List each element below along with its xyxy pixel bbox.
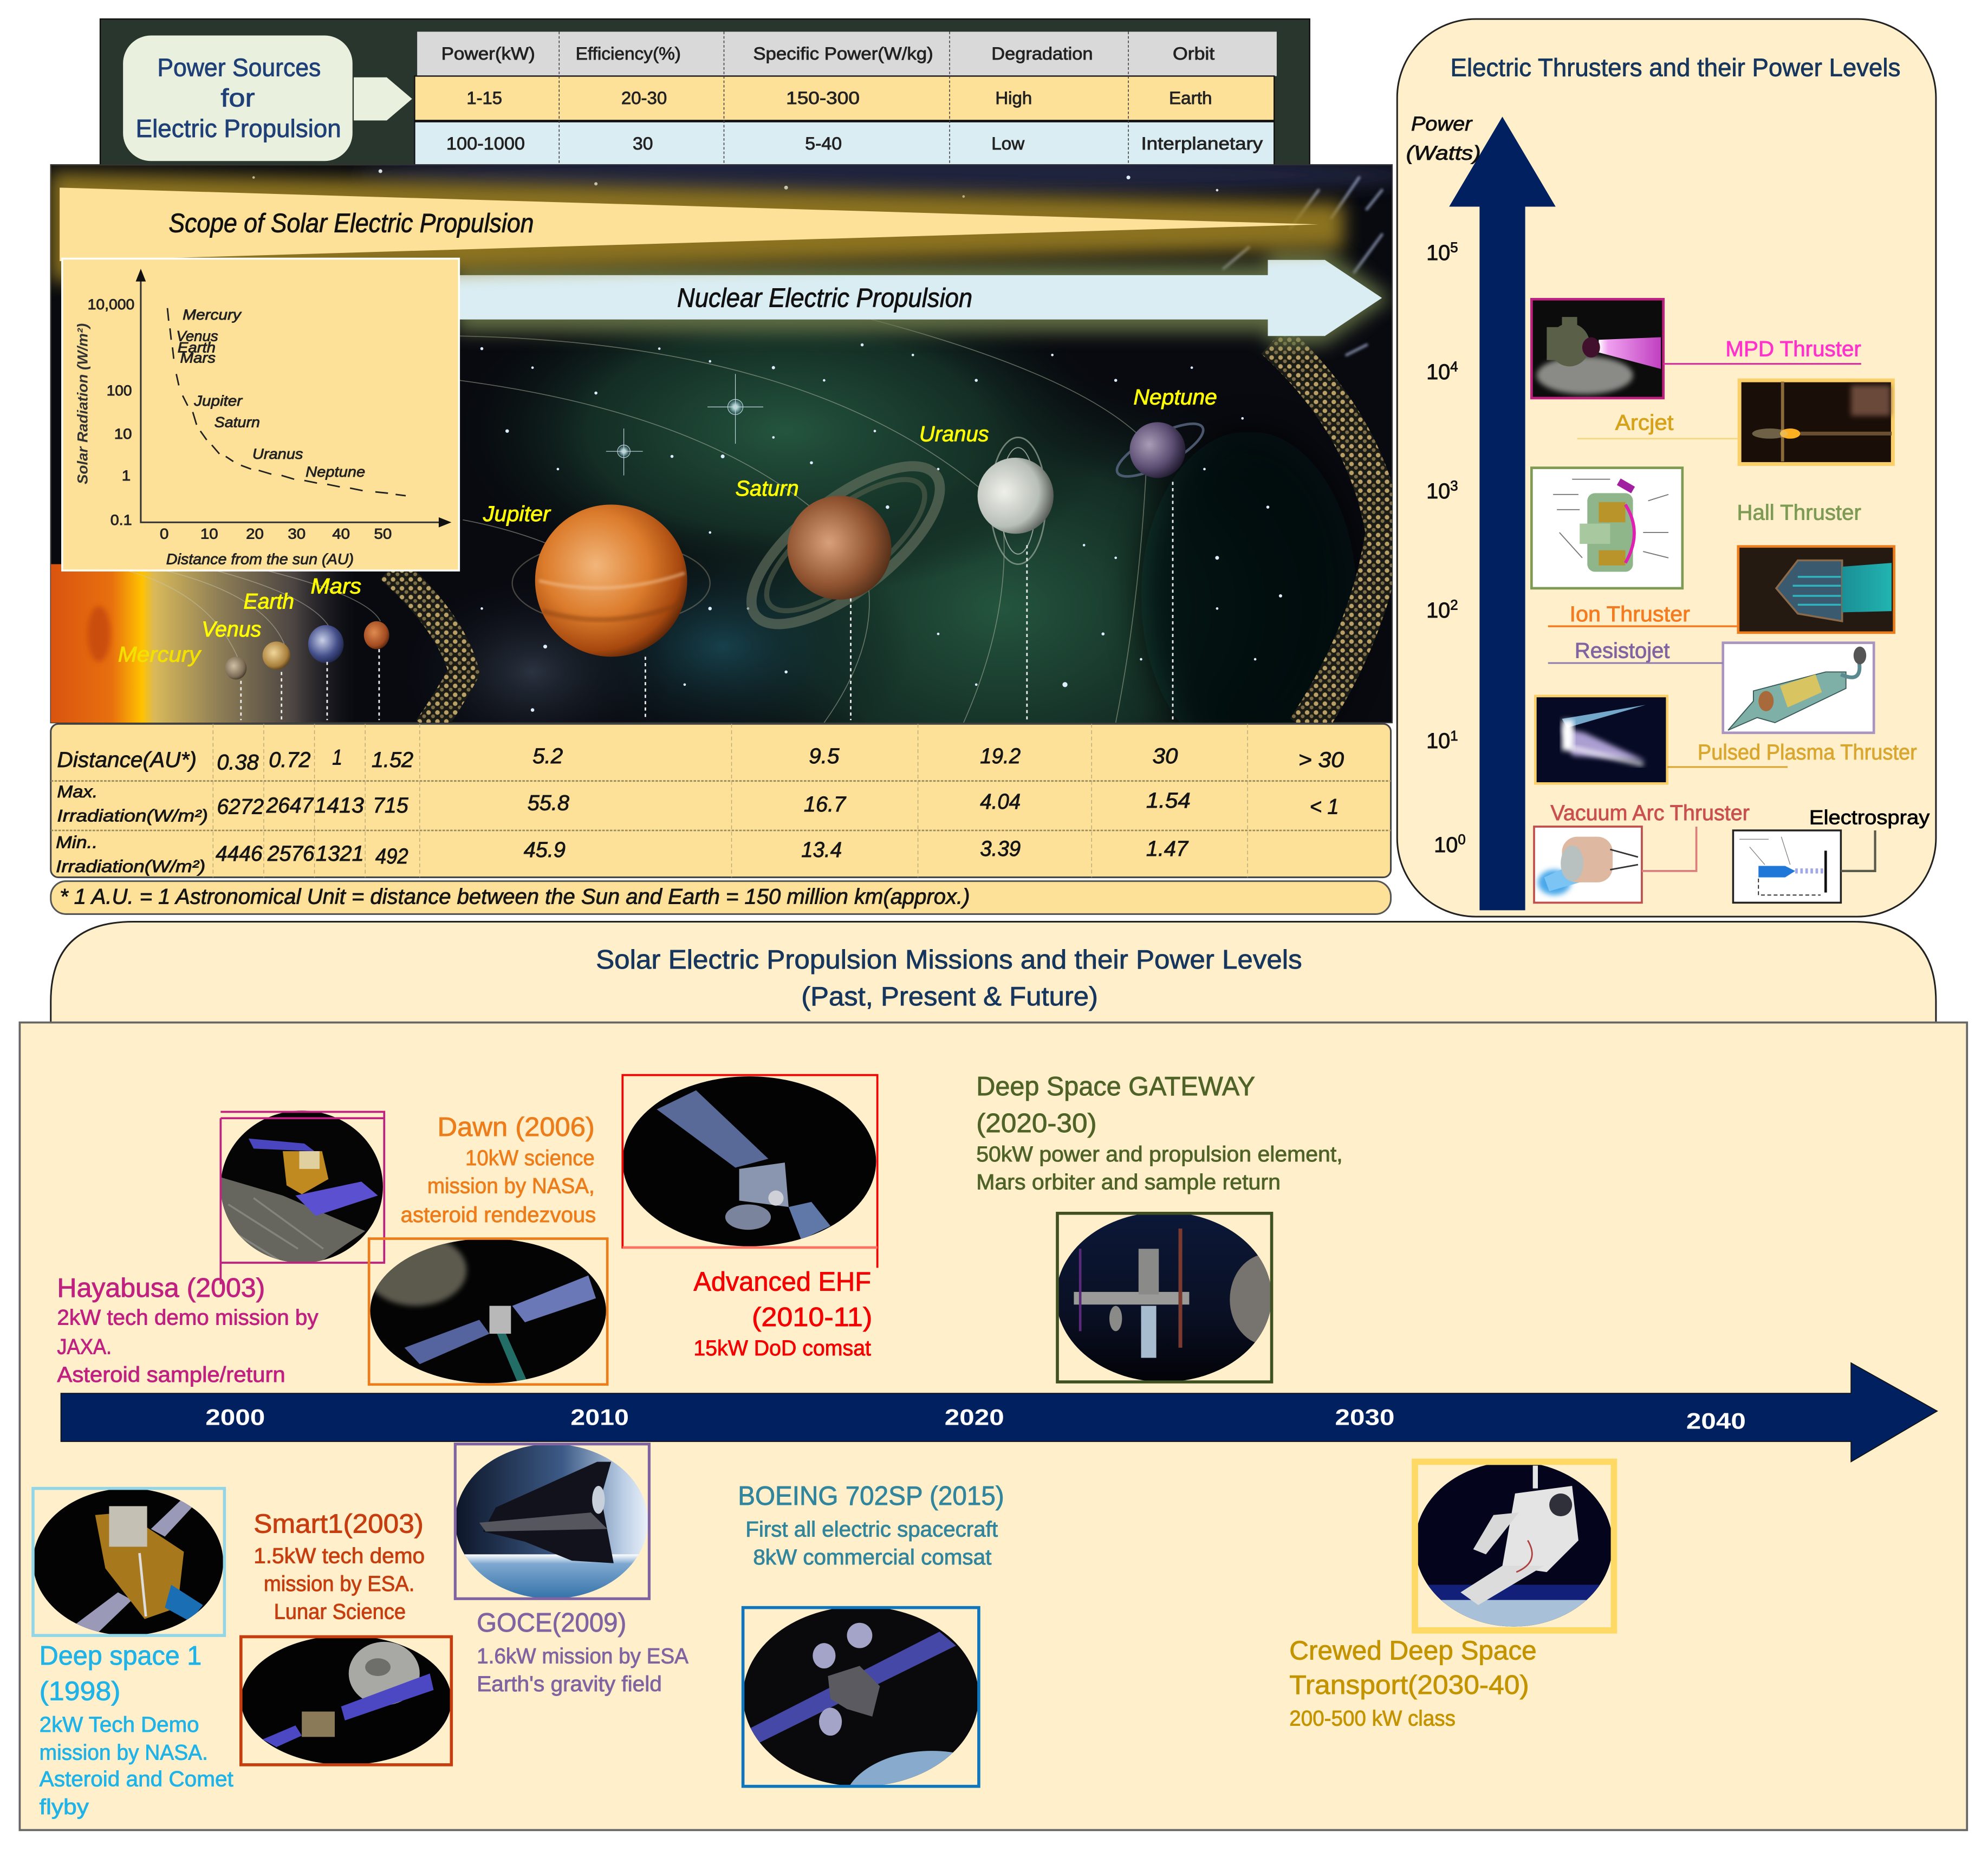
- power sources table: Low: [991, 133, 1025, 153]
- mission: Deep Space 1 text: [40, 1641, 233, 1819]
- power sources table: Efficiency(%): [576, 43, 681, 63]
- thruster: Pulsed Plasma image and label: [1535, 696, 1917, 783]
- power axis labels: 5: [1450, 241, 1458, 256]
- planet labels: Jupiter: [483, 502, 551, 526]
- chart: solar radiation versus distance from the sun: Earth: [178, 340, 216, 356]
- power axis labels: 2: [1450, 598, 1458, 613]
- mission: Smart1 image: [238, 1634, 454, 1768]
- mission: Hayabusa text: 2kW tech demo mission by: [57, 1306, 319, 1330]
- mission: Deep Space 1 text: 2kW Tech Demo: [40, 1713, 199, 1737]
- mission: Deep Space 1 text: flyby: [40, 1795, 89, 1819]
- mission: Deep Space Gateway text: Mars orbiter and sample return: [976, 1170, 1281, 1194]
- mission: Smart1 text: [254, 1510, 425, 1624]
- mission: Crewed Deep Space Transport text: Crewed Deep Space: [1289, 1636, 1537, 1666]
- power sources table: 100-1000: [446, 133, 525, 153]
- arrow: scope of solar electric propulsion: [51, 172, 1344, 282]
- power axis labels: 10: [1426, 599, 1450, 622]
- mission: GOCE text: 1.6kW mission by ESA: [477, 1645, 688, 1668]
- table: planetary distance and irradiation: < 1: [1310, 795, 1339, 819]
- mission: Deep Space Gateway text: Deep Space GATEWAY: [976, 1072, 1255, 1101]
- mission: Smart1 text: mission by ESA.: [264, 1572, 414, 1596]
- table: planetary distance and irradiation: 2576: [267, 842, 315, 866]
- table: planetary distance and irradiation: 6272: [217, 795, 264, 819]
- mission: Hayabusa text: Asteroid sample/return: [57, 1363, 285, 1387]
- mission: Boeing 702SP text: First all electric spacecraft: [745, 1518, 998, 1542]
- table: planetary distance and irradiation: Min..: [56, 833, 98, 852]
- mission: Advanced EHF text: (2010-11): [752, 1303, 872, 1332]
- power axis arrow: [1449, 116, 1556, 910]
- mission: GOCE text: GOCE(2009): [477, 1608, 626, 1638]
- mission: GOCE image: [453, 1441, 652, 1601]
- sparkle stars: [606, 374, 763, 476]
- power sources table: 1-15: [466, 88, 502, 108]
- table: planetary distance and irradiation: 55.8: [528, 791, 569, 815]
- power sources label: [123, 36, 353, 161]
- planet labels: Neptune: [1133, 386, 1217, 410]
- chart: solar radiation versus distance from the sun: Uranus: [252, 446, 303, 462]
- chart: solar radiation versus distance from the sun: Distance from the sun (AU): [166, 550, 354, 567]
- chart: solar radiation versus distance from the sun: 1: [122, 467, 131, 484]
- power axis labels: Power: [1411, 112, 1473, 135]
- power sources label: for: [220, 84, 255, 112]
- table: planetary distance and irradiation: 4446: [216, 842, 263, 866]
- chart: solar radiation versus distance from the sun: [62, 258, 459, 570]
- table: planetary distance and irradiation: 0.38: [217, 751, 259, 775]
- timeline arrow: 2010: [570, 1405, 629, 1430]
- timeline arrow: [61, 1363, 1937, 1462]
- table: planetary distance and irradiation: Distance(AU*): [57, 748, 197, 772]
- chart: solar radiation versus distance from the sun: 20: [246, 526, 264, 542]
- table: planetary distance and irradiation: > 30: [1298, 748, 1344, 772]
- mission: Smart1 text: Smart1(2003): [254, 1510, 424, 1539]
- thruster: Pulsed Plasma image and label: Pulsed Plasma Thruster: [1698, 741, 1917, 764]
- planet labels: Mars: [311, 574, 361, 598]
- power axis labels: 10: [1426, 241, 1450, 265]
- mission: Boeing 702SP text: [738, 1482, 1004, 1569]
- power sources table: Interplanetary: [1141, 133, 1263, 153]
- mission: Crewed Deep Space Transport text: [1289, 1636, 1537, 1730]
- power axis labels: 0: [1458, 833, 1466, 848]
- footnote: astronomical unit definition: * 1 A.U. = 1 Astronomical Unit = distance between the Sun and Earth = 150 million km(approx.): [60, 885, 970, 909]
- mission: Deep Space Gateway image: [1055, 1211, 1306, 1385]
- mission: Dawn text: asteroid rendezvous: [401, 1203, 596, 1227]
- mission: Advanced EHF text: Advanced EHF: [693, 1268, 871, 1297]
- table: planetary distance and irradiation: 1321: [316, 842, 364, 866]
- mission: Smart1 text: Lunar Science: [274, 1600, 406, 1624]
- sun: [51, 564, 355, 723]
- mission: Boeing 702SP text: BOEING 702SP (2015): [738, 1482, 1004, 1511]
- chart: solar radiation versus distance from the sun: Solar Radiation (W/m²): [75, 323, 91, 484]
- mission: Boeing 702SP text: 8kW commercial comsat: [753, 1545, 991, 1569]
- table: planetary distance and irradiation: 1: [332, 745, 342, 769]
- heading: thrusters: Electric Thrusters and their Power Levels: [1451, 53, 1900, 81]
- table: planetary distance and irradiation: Max.: [57, 782, 98, 801]
- chart: solar radiation versus distance from the sun: 10: [200, 526, 218, 542]
- power axis labels: 1: [1450, 729, 1458, 744]
- power sources table: [414, 32, 1277, 167]
- banner: missions heading: Solar Electric Propulsion Missions and their Power Levels: [596, 945, 1302, 975]
- power sources table: 20-30: [621, 88, 667, 108]
- power axis labels: 10: [1434, 833, 1458, 857]
- mission: GOCE text: [477, 1608, 688, 1696]
- chart: solar radiation versus distance from the sun: Mercury: [183, 307, 242, 323]
- mission: Advanced EHF text: [693, 1268, 872, 1360]
- table: planetary distance and irradiation: 3.39: [980, 837, 1021, 861]
- arrow: nuclear electric propulsion: [457, 249, 1392, 345]
- power axis labels: 4: [1450, 360, 1458, 375]
- power sources table: Orbit: [1173, 43, 1214, 63]
- mission: GOCE text: Earth's gravity field: [477, 1672, 662, 1696]
- planet labels: Mercury: [118, 643, 202, 667]
- power axis labels: 10: [1426, 360, 1450, 384]
- orbits: [127, 304, 1147, 723]
- mission: Dawn text: [401, 1113, 596, 1227]
- mission: Boeing 702SP image: [740, 1605, 1021, 1851]
- mission: Hayabusa image: [216, 1103, 393, 1284]
- chart: solar radiation versus distance from the sun: 100: [107, 382, 132, 399]
- chart: solar radiation versus distance from the sun: 30: [288, 526, 306, 542]
- table: planetary distance and irradiation: [51, 724, 1391, 878]
- table: planetary distance and irradiation: Irradiation(W/m²): [56, 856, 205, 876]
- thruster: Arcjet image and label: [1577, 380, 1893, 464]
- chart: solar radiation versus distance from the sun: 40: [332, 526, 350, 542]
- mission: Deep Space Gateway text: [976, 1072, 1343, 1194]
- mission: Advanced EHF text: 15kW DoD comsat: [693, 1336, 871, 1360]
- power axis labels: (Watts): [1406, 141, 1481, 164]
- power sources table: 30: [633, 133, 653, 153]
- planet labels: Earth: [243, 589, 294, 613]
- table: planetary distance and irradiation: 19.2: [980, 744, 1021, 768]
- arrow: scope of solar electric propulsion: Scope of Solar Electric Propulsion: [168, 209, 534, 238]
- table: planetary distance and irradiation: 2647: [266, 794, 314, 817]
- thruster: Hall image and label: [1531, 468, 1861, 588]
- table: planetary distance and irradiation: 4.04: [980, 790, 1021, 814]
- thruster: Arcjet image and label: Arcjet: [1615, 411, 1673, 434]
- meteor streaks: [1224, 178, 1382, 355]
- mission: Hayabusa text: JAXA.: [57, 1335, 112, 1359]
- asteroid belts: [391, 340, 1385, 729]
- thruster: MPD image and label: [1531, 299, 1861, 398]
- mission: Dawn text: mission by NASA,: [427, 1174, 595, 1198]
- chart: solar radiation versus distance from the sun: Venus: [176, 328, 218, 345]
- power axis labels: 10: [1426, 729, 1450, 753]
- inner planets: [225, 621, 389, 679]
- table: planetary distance and irradiation: 30: [1153, 744, 1178, 768]
- mission: Deep Space 1 text: mission by NASA.: [40, 1740, 208, 1764]
- power sources table: Earth: [1169, 88, 1212, 108]
- chart: solar radiation versus distance from the sun: 50: [374, 526, 392, 542]
- power sources table: 5-40: [805, 133, 842, 153]
- planet: Uranus: [978, 437, 1054, 564]
- mission: Deep Space Gateway text: 50kW power and propulsion element,: [976, 1142, 1343, 1166]
- mission: Hayabusa text: Hayabusa (2003): [57, 1274, 265, 1303]
- power sources table: Degradation: [991, 43, 1093, 63]
- chart: solar radiation versus distance from the sun: Mars: [180, 349, 216, 366]
- table: planetary distance and irradiation: 0.72: [269, 748, 311, 772]
- mission: Deep Space 1 text: Deep space 1: [40, 1641, 202, 1671]
- planet labels: Venus: [202, 618, 261, 641]
- banner: missions heading: (Past, Present & Future): [801, 982, 1098, 1011]
- table: planetary distance and irradiation: 715: [373, 794, 409, 817]
- mission: Deep Space 1 image: [30, 1486, 226, 1638]
- chart: solar radiation versus distance from the sun: Neptune: [306, 464, 365, 480]
- thruster: Vacuum Arc image and label: [1534, 801, 1750, 902]
- mission: Crewed Deep Space Transport image: [1412, 1459, 1615, 1631]
- thruster: Resistojet image and label: [1548, 639, 1874, 733]
- planet: Saturn: [746, 461, 945, 629]
- power axis labels: 10: [1426, 479, 1450, 503]
- thruster: Hall image and label: Hall Thruster: [1737, 501, 1861, 525]
- power axis labels: 3: [1450, 479, 1458, 494]
- power sources label: Power Sources: [157, 53, 321, 81]
- thruster: Resistojet image and label: Resistojet: [1575, 639, 1669, 663]
- mission: Dawn text: 10kW science: [465, 1146, 595, 1170]
- table: planetary distance and irradiation: 1.47: [1146, 837, 1189, 861]
- table: planetary distance and irradiation: 1.52: [372, 748, 413, 772]
- planet labels: Uranus: [919, 422, 989, 446]
- thruster: Electrospray image and label: [1733, 806, 1930, 902]
- chart: solar radiation versus distance from the sun: 0: [160, 526, 168, 542]
- table: planetary distance and irradiation: Irradiation(W/m²): [57, 806, 208, 826]
- mission: Hayabusa text: [57, 1274, 319, 1387]
- thruster: Ion image and label: Ion Thruster: [1570, 602, 1690, 626]
- table: planetary distance and irradiation: 13.4: [801, 838, 842, 862]
- table: planetary distance and irradiation: 1.54: [1146, 789, 1191, 813]
- power sources table: Specific Power(W/kg): [753, 43, 933, 63]
- table: planetary distance and irradiation: 9.5: [809, 744, 840, 768]
- mission: Crewed Deep Space Transport text: Transport(2030-40): [1289, 1671, 1529, 1700]
- chart: solar radiation versus distance from the sun: Saturn: [215, 414, 260, 431]
- power sources label: Electric Propulsion: [136, 114, 341, 142]
- planet labels: [118, 386, 1217, 667]
- panel: power sources table backdrop: [100, 19, 1310, 168]
- table: planetary distance and irradiation: 16.7: [804, 793, 847, 816]
- banner: missions heading: [51, 921, 1936, 1027]
- thruster: MPD image and label: MPD Thruster: [1725, 337, 1861, 361]
- footnote: astronomical unit definition: [51, 881, 1391, 914]
- mission: Dawn text: Dawn (2006): [438, 1113, 595, 1142]
- stars: [252, 169, 1282, 712]
- planet: Neptune: [1116, 422, 1205, 478]
- mission: Smart1 text: 1.5kW tech demo: [254, 1544, 425, 1568]
- timeline arrow: 2000: [205, 1405, 265, 1430]
- panel: missions timeline: [20, 1023, 1967, 1851]
- mission: Deep Space Gateway text: (2020-30): [976, 1109, 1097, 1138]
- table: planetary distance and irradiation: 45.9: [524, 838, 566, 862]
- arrow: nuclear electric propulsion: Nuclear Electric Propulsion: [677, 283, 972, 313]
- arrow: power sources to table: [354, 77, 412, 120]
- planet labels: Saturn: [736, 477, 799, 501]
- power sources table: 150-300: [786, 88, 860, 108]
- power sources table: Power(kW): [441, 43, 535, 63]
- power axis labels: [1406, 112, 1481, 857]
- timeline arrow: 2040: [1686, 1408, 1746, 1434]
- dotted drop lines: [241, 482, 1173, 720]
- thruster: Ion image and label: [1548, 547, 1894, 633]
- chart: solar radiation versus distance from the sun: 10,000: [88, 296, 134, 313]
- mission: Deep Space 1 text: Asteroid and Comet: [40, 1768, 233, 1791]
- timeline arrow: 2020: [945, 1405, 1004, 1430]
- mission: Dawn image: [365, 1235, 609, 1386]
- power sources table: High: [995, 88, 1032, 108]
- mission: Crewed Deep Space Transport text: 200-500 kW class: [1289, 1706, 1456, 1730]
- table: planetary distance and irradiation: 1413: [315, 794, 364, 817]
- table: planetary distance and irradiation: 5.2: [532, 744, 563, 768]
- thruster: Electrospray image and label: Electrospray: [1809, 806, 1930, 828]
- chart: solar radiation versus distance from the sun: 10: [114, 426, 132, 442]
- mission: Deep Space 1 text: (1998): [40, 1677, 120, 1706]
- chart: solar radiation versus distance from the sun: Jupiter: [193, 393, 243, 409]
- panel: solar system illustration: [50, 164, 1393, 724]
- timeline arrow: 2030: [1335, 1405, 1395, 1430]
- chart: solar radiation versus distance from the sun: 0.1: [111, 512, 132, 528]
- table: planetary distance and irradiation: 492: [375, 845, 408, 868]
- planet: Jupiter: [512, 504, 710, 657]
- panel: electric thrusters and power levels: [1397, 19, 1936, 917]
- thruster: Vacuum Arc image and label: Vacuum Arc Thruster: [1550, 801, 1750, 825]
- mission: Advanced EHF image: [621, 1075, 880, 1268]
